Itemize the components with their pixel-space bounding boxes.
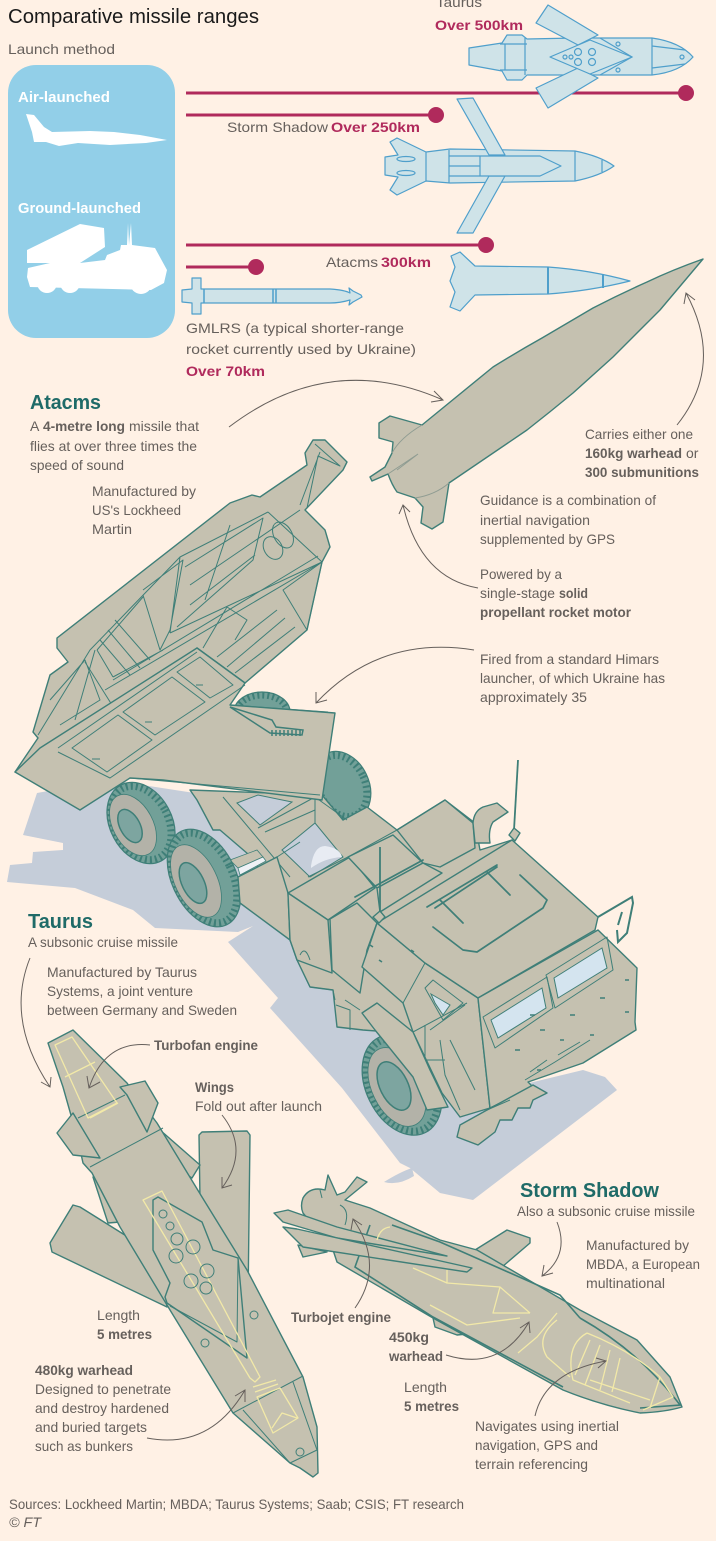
cab windows <box>483 977 553 1048</box>
label: Turbojet engine: Turbojet engine <box>291 1309 391 1325</box>
text: Storm Shadow navigation <box>475 1418 619 1472</box>
illustration: large Atacms missile <box>370 259 703 529</box>
text: motor: solid <box>559 585 588 601</box>
text: Atacms description <box>30 418 199 473</box>
panel: launch method: Ground-launched <box>18 200 141 217</box>
title: Comparative missile ranges <box>8 6 259 28</box>
text: warhead: Carries either one <box>585 426 693 442</box>
label: Storm Shadow warhead: warhead <box>388 1348 443 1364</box>
panel: launch method <box>8 65 175 338</box>
label: Taurus range: Over 500km <box>435 17 523 33</box>
icon: small GMLRS rocket <box>182 278 362 314</box>
label: Storm Shadow warhead: 450kg <box>389 1329 429 1345</box>
icon: small Atacms missile <box>450 252 630 311</box>
text: Taurus warhead: Designed to penetrate <box>35 1381 171 1397</box>
text: Atacms description: A <box>30 418 40 434</box>
text: motor: Powered by a <box>480 566 562 582</box>
label: Taurus length: 5 metres <box>97 1326 152 1342</box>
text: Storm Shadow navigation: Navigates using inertial <box>475 1418 619 1434</box>
label: Atacms range: Atacms <box>326 254 378 270</box>
heading: Taurus: Taurus <box>28 911 93 933</box>
label: Storm Shadow length <box>404 1379 459 1414</box>
label: Storm Shadow range: Storm Shadow <box>227 119 329 135</box>
chassis frame <box>190 790 512 1035</box>
footer: sources: Sources: Lockheed Martin; MBDA; Taurus Systems; Saab; CSIS; FT research <box>9 1496 464 1512</box>
text: Taurus warhead <box>35 1362 171 1454</box>
footer: sources: © FT <box>9 1514 42 1530</box>
text: Atacms manufacturer: US's Lockheed <box>92 502 181 518</box>
arrow: Himars launcher <box>316 647 474 703</box>
antenna front <box>373 847 385 923</box>
label: GMLRS range: Over 70km <box>186 363 265 379</box>
text: Taurus warhead: such as bunkers <box>35 1438 133 1454</box>
arrow: Storm Shadow overview <box>542 1222 561 1276</box>
launcher deck <box>15 648 335 810</box>
panel: launch method: Air-launched <box>18 89 110 106</box>
arrow: Taurus overview <box>21 958 51 1087</box>
label: Storm Shadow length: 5 metres <box>404 1398 459 1414</box>
text: Atacms manufacturer <box>92 483 196 537</box>
antenna rear <box>509 760 520 841</box>
text: Taurus warhead: 480kg warhead <box>35 1362 133 1378</box>
text: Atacms description: missile that <box>129 418 199 434</box>
text: motor: single-stage <box>480 585 555 601</box>
text: Storm Shadow manufacturer: MBDA, a European <box>586 1256 700 1272</box>
label: Storm Shadow warhead <box>388 1329 443 1364</box>
text: warhead: 300 submunitions <box>585 464 699 480</box>
label: Turbofan engine: Turbofan engine <box>154 1037 258 1053</box>
text: Taurus warhead: and destroy hardened <box>35 1400 169 1416</box>
arrow: Taurus warhead <box>147 1390 245 1440</box>
heading: Atacms: Atacms <box>30 392 101 414</box>
label: Taurus length <box>97 1307 152 1342</box>
text: guidance <box>480 492 656 547</box>
text: Taurus warhead: and buried targets <box>35 1419 147 1435</box>
text: Taurus manufacturer: Systems, a joint venture <box>47 983 193 999</box>
label: GMLRS range: rocket currently used by Ukraine) <box>186 341 416 357</box>
label: Taurus range <box>435 0 523 33</box>
rear wheel <box>93 770 189 876</box>
fender <box>362 1003 448 1110</box>
text: guidance: supplemented by GPS <box>480 531 615 547</box>
illustration: Himars launcher <box>15 440 637 1148</box>
arrow: warhead to nose <box>677 293 703 425</box>
text: Atacms description: 4-metre long <box>43 418 125 434</box>
text: Taurus subtitle: A subsonic cruise missile <box>28 934 178 950</box>
range bars <box>186 85 694 275</box>
label: Storm Shadow length: Length <box>404 1379 447 1395</box>
text: warhead: 160kg warhead <box>585 445 682 461</box>
text: Atacms description: flies at over three times the <box>30 438 197 454</box>
wing mirror <box>598 897 633 942</box>
text: Storm Shadow navigation: terrain referencing <box>475 1456 588 1472</box>
cab roof <box>377 840 598 998</box>
label: Storm Shadow range: Over 250km <box>331 119 420 135</box>
label: Wings: Fold out after launch <box>195 1098 322 1114</box>
far wheels <box>234 692 382 830</box>
illustration: large Storm Shadow missile <box>274 1175 682 1413</box>
text: Atacms description: speed of sound <box>30 457 124 473</box>
arrow: Turbojet engine <box>351 1219 370 1308</box>
arrow: Storm Shadow warhead <box>446 1322 530 1359</box>
text: guidance: Guidance is a combination of <box>480 492 656 508</box>
exhaust stack <box>473 803 508 843</box>
footer: sources <box>9 1496 464 1530</box>
heading: Storm Shadow: Storm Shadow <box>520 1180 659 1202</box>
text: Storm Shadow manufacturer <box>586 1237 700 1291</box>
label: Wings: Wings <box>195 1079 234 1095</box>
text: Atacms manufacturer: Manufactured by <box>92 483 196 499</box>
text: launcher: approximately 35 <box>480 689 587 705</box>
label: Wings <box>195 1079 322 1114</box>
arrow: missile description to Atacms <box>229 380 443 427</box>
front wheel <box>346 1022 458 1148</box>
illustration: large Taurus missile <box>48 1030 318 1477</box>
text: motor <box>480 566 632 620</box>
text: Storm Shadow manufacturer: multinational <box>586 1275 665 1291</box>
launcher pod <box>15 440 347 772</box>
label: Taurus length: Length <box>97 1307 140 1323</box>
text: Storm Shadow navigation: navigation, GPS and <box>475 1437 598 1453</box>
label: Atacms range <box>326 254 431 270</box>
label: GMLRS range <box>186 320 416 379</box>
shadow of launcher truck <box>7 780 617 1200</box>
cab <box>362 840 637 1145</box>
text: launcher: launcher, of which Ukraine has <box>480 670 665 686</box>
box compartments behind cab <box>238 800 475 1030</box>
arrow: Turbofan engine <box>87 1045 150 1088</box>
text: guidance: inertial navigation <box>480 512 590 528</box>
middle wheel <box>152 817 256 939</box>
cab roof hatch <box>427 865 547 952</box>
label: Atacms range: 300km <box>381 254 431 270</box>
icon: small Storm Shadow missile <box>385 98 614 233</box>
shadow fragment <box>384 1168 414 1183</box>
subheading: launch method: Launch method <box>8 41 115 57</box>
text: launcher: Fired from a standard Himars <box>480 651 659 667</box>
text: warhead <box>585 426 699 480</box>
text: Storm Shadow subtitle: Also a subsonic cruise missile <box>517 1203 695 1219</box>
text: Taurus manufacturer <box>47 964 237 1018</box>
label: GMLRS range: GMLRS (a typical shorter-range <box>186 320 404 336</box>
label: Storm Shadow range <box>227 119 420 135</box>
arrow: motor to tail <box>399 505 478 588</box>
cab front <box>478 930 637 1108</box>
cab side <box>362 923 490 1117</box>
text: Atacms manufacturer: Martin <box>92 521 132 537</box>
text: Storm Shadow manufacturer: Manufactured by <box>586 1237 689 1253</box>
text: Taurus manufacturer: between Germany and Sweden <box>47 1002 237 1018</box>
cab details <box>403 963 590 1110</box>
arrow: Storm Shadow navigation <box>535 1358 606 1416</box>
text: warhead: or <box>686 445 699 461</box>
text: motor: propellant rocket motor <box>480 604 632 620</box>
bumper <box>457 1085 547 1145</box>
icon: small Taurus missile <box>469 5 693 108</box>
text: launcher <box>480 651 665 705</box>
arrow: wings <box>222 1115 236 1188</box>
text: Taurus manufacturer: Manufactured by Taurus <box>47 964 197 980</box>
